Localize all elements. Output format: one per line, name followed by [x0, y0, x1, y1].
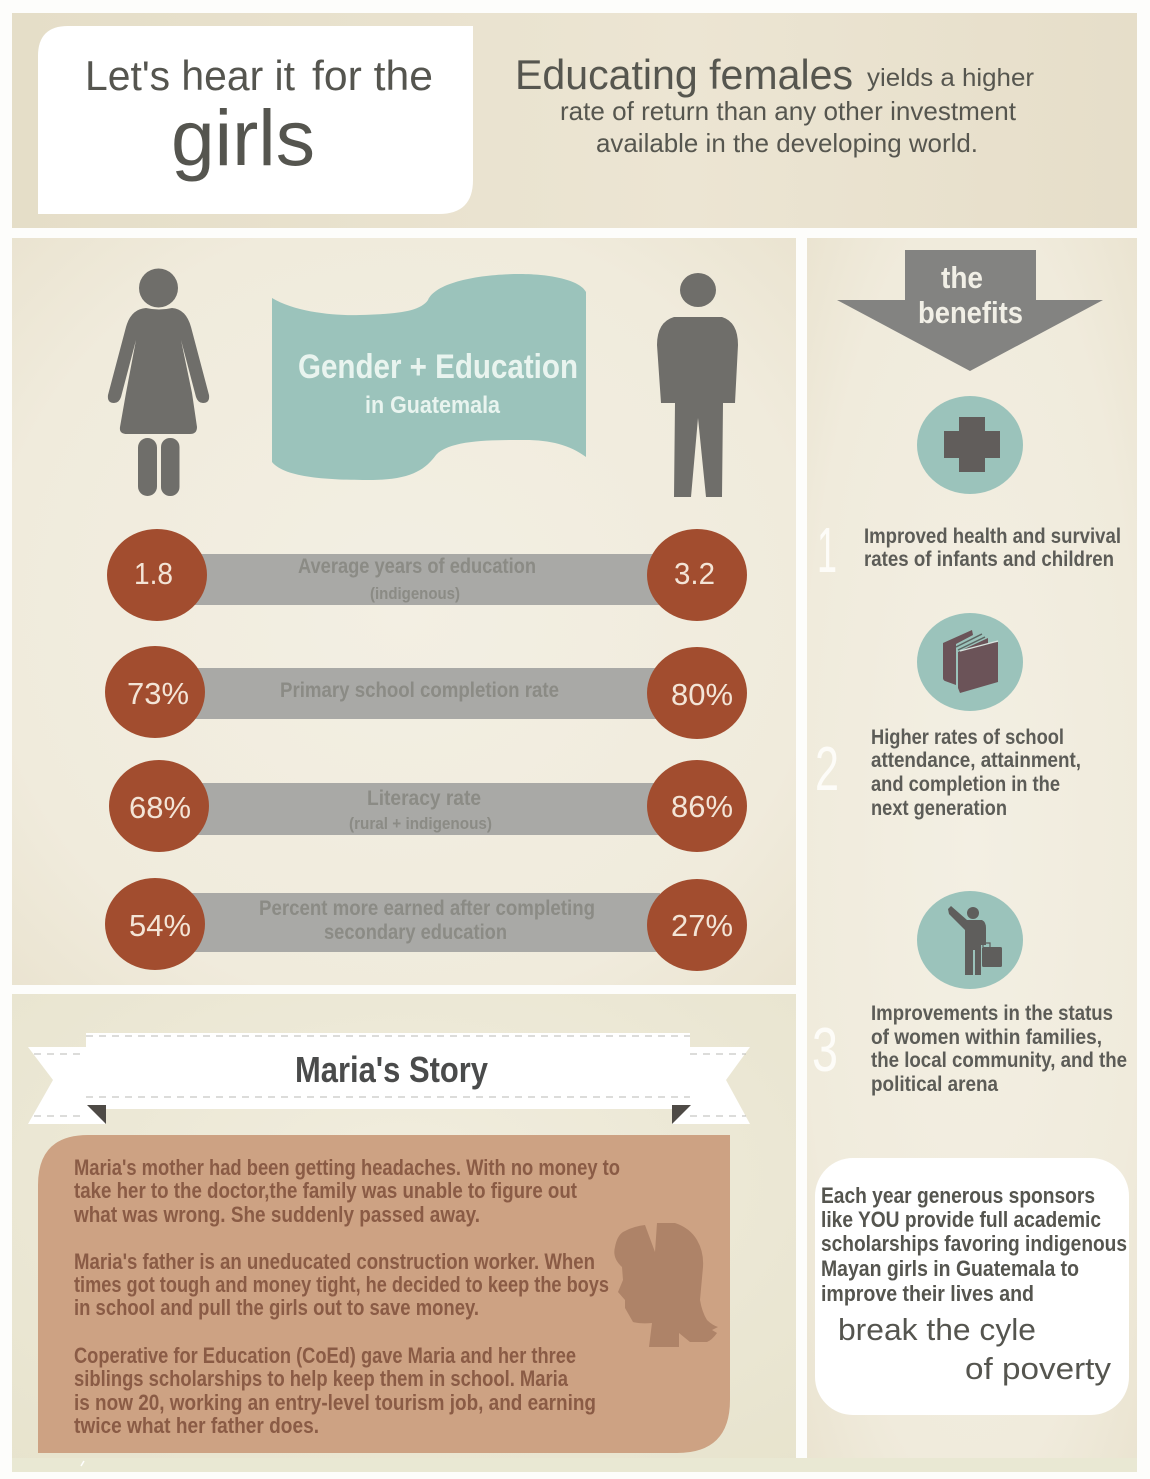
benefit 3 — [812, 1002, 1127, 1096]
benefit 2: Higher rates of school — [871, 726, 1064, 749]
story text — [73, 1155, 620, 1438]
intro statement: Educating females — [515, 51, 853, 98]
story text: twice what her father does. — [74, 1413, 319, 1438]
icon: books — [917, 613, 1023, 711]
benefit 2: and completion in the — [871, 773, 1060, 796]
story text: Maria's mother had been getting headaches. With no money to — [74, 1155, 620, 1180]
story text: siblings scholarships to help keep them in school. Maria — [74, 1366, 569, 1391]
stat row: primary school completion — [105, 646, 747, 739]
icon: health cross — [917, 396, 1023, 494]
stat row: primary school completion: 73% — [127, 676, 189, 711]
stat row: literacy rate: (rural + indigenous) — [349, 814, 492, 833]
title card: girls — [171, 93, 315, 182]
story text: in school and pull the girls out to save money. — [74, 1295, 479, 1320]
stat row: literacy rate: 86% — [671, 789, 733, 824]
intro statement: rate of return than any other investment — [560, 96, 1017, 126]
arrow: the benefits: the — [941, 260, 983, 295]
callout: scholarships: break the cyle — [838, 1312, 1036, 1347]
arrow: the benefits — [837, 250, 1103, 371]
panel: Maria's story — [12, 994, 796, 1458]
benefit 3: 3 — [812, 1016, 838, 1085]
banner: gender and education in Guatemala: in Guatemala — [365, 392, 501, 419]
arrow: the benefits: benefits — [918, 295, 1023, 330]
intro statement: available in the developing world. — [596, 128, 978, 158]
icon: man — [657, 273, 738, 497]
callout: scholarships: like YOU provide full academic — [821, 1207, 1101, 1232]
title card: for the — [312, 52, 433, 99]
banner: gender and education in Guatemala: Gender + Education — [298, 348, 578, 386]
story text: Coperative for Education (CoEd) gave Maria and her three — [74, 1343, 576, 1368]
banner: gender and education in Guatemala — [272, 274, 586, 480]
stat row: percent more earned: 54% — [129, 908, 191, 943]
story card — [38, 1135, 730, 1453]
benefit 2 — [815, 726, 1081, 820]
stat row: percent more earned: secondary education — [324, 921, 507, 944]
panel: benefits — [807, 238, 1137, 1458]
callout: scholarships: Each year generous sponsors — [821, 1183, 1095, 1208]
stat row: percent more earned — [105, 878, 747, 971]
callout: scholarships — [815, 1158, 1129, 1415]
title card: Let's hear it — [85, 52, 295, 99]
benefit 1: rates of infants and children — [864, 548, 1114, 571]
stat row: average years of education: 3.2 — [674, 556, 715, 591]
intro statement: yields a higher — [867, 64, 1034, 92]
ribbon heading — [28, 1033, 750, 1124]
benefit 2: 2 — [815, 735, 839, 804]
stat row: primary school completion: Primary school completion rate — [280, 679, 559, 702]
benefit 3: political arena — [871, 1073, 998, 1096]
benefit 3: Improvements in the status — [871, 1002, 1113, 1025]
benefit 2: attendance, attainment, — [871, 749, 1081, 772]
callout: scholarships: of poverty — [965, 1351, 1112, 1386]
intro statement — [515, 51, 1034, 158]
benefit 1 — [817, 514, 1121, 586]
benefit 3: of women within families, — [871, 1026, 1102, 1049]
stat row: literacy rate: 68% — [129, 790, 191, 825]
stat row: percent more earned: 27% — [671, 908, 733, 943]
panel: header — [12, 13, 1137, 228]
story text: Maria's father is an uneducated construction worker. When — [74, 1249, 595, 1274]
stat row: percent more earned: Percent more earned after completing — [259, 897, 595, 920]
icon: girl profile silhouette — [614, 1223, 718, 1347]
stat row: literacy rate: Literacy rate — [367, 787, 481, 810]
story text: take her to the doctor,the family was unable to figure out — [74, 1178, 578, 1203]
benefit 1: Improved health and survival — [864, 525, 1121, 548]
stat row: average years of education: Average years of education — [298, 555, 536, 578]
benefit 1: 1 — [817, 514, 837, 586]
ribbon heading: Maria's Story — [295, 1049, 488, 1090]
story text: is now 20, working an entry-level tourism job, and earning — [74, 1390, 596, 1415]
benefit 2: next generation — [871, 797, 1007, 820]
callout: scholarships: Mayan girls in Guatemala to — [821, 1256, 1079, 1281]
stat row: primary school completion: 80% — [671, 677, 733, 712]
story text: what was wrong. She suddenly passed away. — [73, 1202, 480, 1227]
callout: scholarships: improve their lives and — [821, 1281, 1034, 1306]
panel: gender and education — [12, 238, 796, 985]
stat row: literacy rate — [109, 760, 747, 852]
stat row: average years of education — [107, 529, 747, 621]
icon: woman — [108, 268, 209, 496]
title card — [38, 26, 473, 214]
stat row: average years of education: 1.8 — [134, 556, 173, 591]
icon: person with raised arm and briefcase — [917, 891, 1023, 989]
stat row: average years of education: (indigenous) — [370, 584, 460, 603]
story text: times got tough and money tight, he decided to keep the boys — [74, 1272, 609, 1297]
